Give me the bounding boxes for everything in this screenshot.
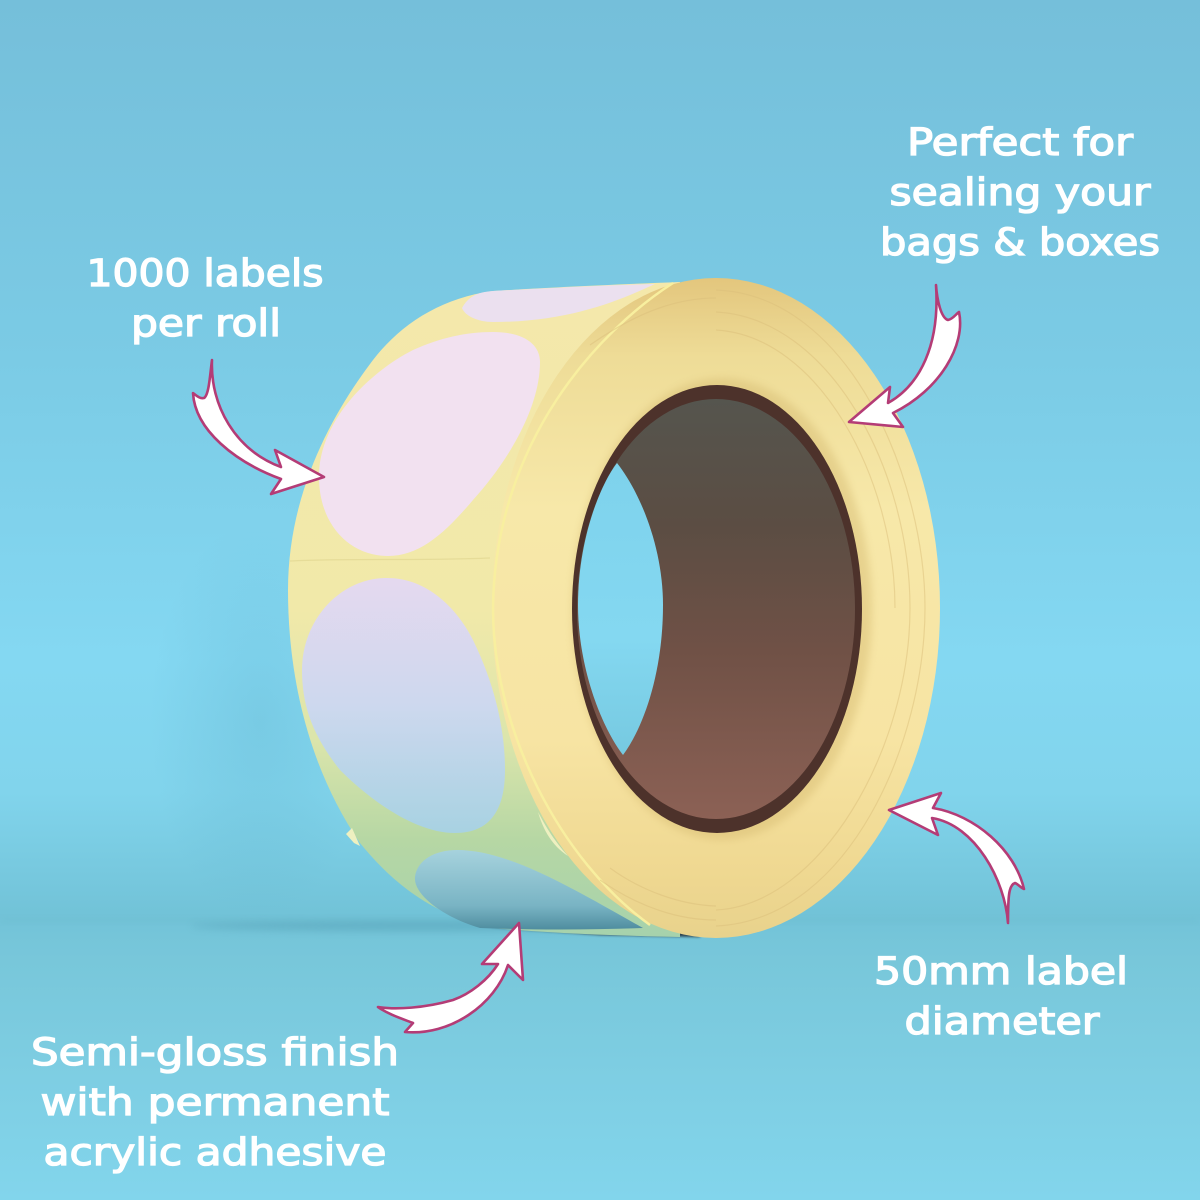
arrow: 1000 labels <box>193 360 324 494</box>
text: perfect for sealing <box>880 121 1160 264</box>
text: semi-gloss: acrylic adhesive <box>44 1131 386 1174</box>
text: 1000 labels <box>86 252 324 345</box>
backing paper seam <box>290 558 490 561</box>
text: semi-gloss: with permanent <box>40 1081 390 1124</box>
text: semi-gloss <box>31 1031 399 1174</box>
light rim highlight <box>493 283 673 925</box>
wound layer lines <box>590 290 925 926</box>
rim shading <box>572 378 872 840</box>
text: perfect for sealing: bags & boxes <box>880 221 1160 264</box>
top label sliver <box>462 284 655 322</box>
label roll <box>288 278 940 938</box>
text: 1000 labels: 1000 labels <box>86 252 324 295</box>
arrow: semi-gloss <box>378 923 523 1032</box>
torn backing edges <box>346 812 568 856</box>
pink round label <box>319 332 540 556</box>
contact shadow <box>490 927 700 937</box>
lilac round label <box>302 578 505 833</box>
text: 50mm <box>874 950 1128 1043</box>
text: 50mm: diameter <box>904 1000 1100 1043</box>
cardboard core <box>572 385 862 833</box>
see-through hole <box>578 463 663 755</box>
bottom blue label <box>415 850 643 930</box>
roll body with backing paper <box>288 282 680 937</box>
text: 50mm: 50mm label <box>874 950 1128 993</box>
text: semi-gloss: Semi-gloss finish <box>31 1031 399 1074</box>
roll side face <box>492 278 940 938</box>
text: perfect for sealing: sealing your <box>890 171 1151 214</box>
arrow: diameter <box>889 793 1024 923</box>
text: 1000 labels: per roll <box>131 302 281 345</box>
arrow: sealing <box>849 285 960 427</box>
text: perfect for sealing: Perfect for <box>907 121 1134 164</box>
